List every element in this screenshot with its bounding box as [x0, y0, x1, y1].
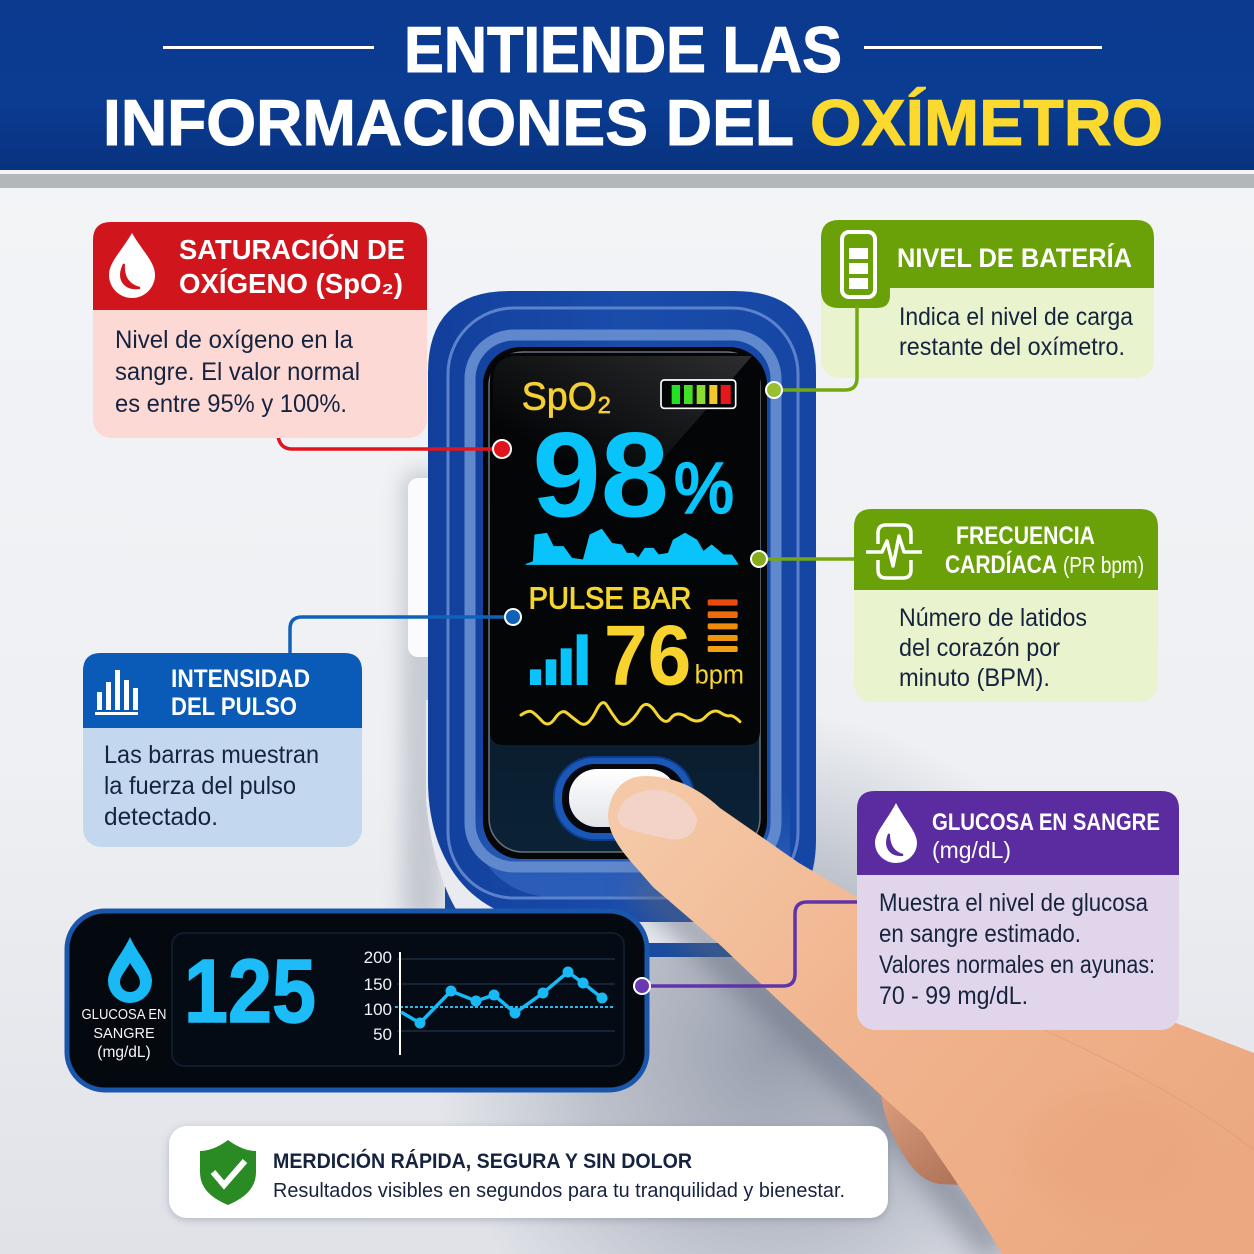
- glucose monitor panel: [67, 911, 647, 1090]
- description: del corazón por: [899, 634, 1060, 662]
- axis labels: 50: [373, 1025, 392, 1044]
- heading line 2: DEL PULSO: [171, 693, 297, 721]
- heading unit: (mg/dL): [932, 837, 1011, 863]
- description: Las barras muestran: [104, 741, 319, 769]
- pulse waveform: [521, 703, 740, 724]
- card header: [854, 509, 1158, 590]
- description: detectado.: [104, 803, 218, 831]
- card body: [821, 220, 1154, 378]
- callout: frecuencia cardíaca: [759, 509, 1158, 702]
- description: Nivel de oxígeno en la: [115, 326, 353, 354]
- heading: SATURACIÓN DE: [179, 234, 405, 265]
- hand pressing the button: [608, 776, 1254, 1254]
- description: en sangre estimado.: [879, 920, 1081, 948]
- thumb: [881, 1095, 965, 1185]
- card header: [857, 791, 1179, 875]
- banner text: Resultados visibles en segundos para tu tranquilidad y bienestar.: [273, 1180, 845, 1202]
- panel label: [82, 1007, 166, 1061]
- power button: [554, 757, 694, 840]
- card body: [857, 791, 1179, 1030]
- connector: purple: [642, 902, 860, 986]
- icon: blood drop: [875, 803, 917, 863]
- heading unit: (PR bpm): [1063, 552, 1144, 578]
- finger and palm: [608, 776, 1254, 1254]
- signal bars: [530, 634, 588, 685]
- description: sangre. El valor normal: [115, 358, 360, 386]
- card body: [854, 509, 1158, 702]
- screen display: [490, 353, 760, 745]
- description: es entre 95% y 100%.: [115, 390, 347, 418]
- device shadow: [402, 470, 442, 920]
- card body: [83, 653, 362, 847]
- plethysmograph waveform: [526, 529, 737, 564]
- orange level bars: [708, 599, 738, 652]
- description: [104, 741, 319, 831]
- description: 70 - 99 mg/dL.: [879, 982, 1028, 1010]
- heading: NIVEL DE BATERÍA: [897, 242, 1132, 273]
- title highlight: OXÍMETRO: [810, 86, 1163, 159]
- description: [115, 326, 360, 418]
- description: [899, 604, 1087, 692]
- heading line 2: CARDÍACA: [945, 550, 1057, 579]
- description: Valores normales en ayunas:: [879, 951, 1155, 979]
- header banner: [0, 0, 1254, 188]
- icon: oxygen drop: [109, 233, 155, 298]
- connector: green: [774, 306, 857, 390]
- pulse oximeter device: [402, 291, 816, 957]
- finger clip tab: [408, 478, 438, 657]
- heading: GLUCOSA EN SANGRE: [932, 809, 1160, 836]
- description: Muestra el nivel de glucosa: [879, 889, 1148, 917]
- SpO2 label: SpO₂: [522, 374, 612, 418]
- front shell: [428, 291, 816, 922]
- description: restante del oxímetro.: [899, 333, 1125, 361]
- knuckle shading: [1020, 1090, 1200, 1210]
- description: Número de latidos: [899, 604, 1087, 632]
- description: [899, 303, 1133, 361]
- skin crease: [1044, 1030, 1254, 1150]
- axis labels: [364, 948, 392, 1044]
- description: minuto (BPM).: [899, 664, 1050, 692]
- axis labels: 150: [364, 975, 392, 994]
- callout: nivel de batería: [774, 220, 1154, 390]
- panel label: SANGRE: [93, 1026, 155, 1042]
- pulse bar label: PULSE BAR: [529, 582, 691, 616]
- pulse rate value: 76: [604, 608, 691, 703]
- icon: bars: [95, 670, 138, 715]
- bottom banner: [169, 1126, 888, 1218]
- heading: INTENSIDAD: [171, 665, 310, 693]
- bpm unit: bpm: [695, 659, 744, 689]
- screen bezel: [483, 347, 767, 859]
- data series: [401, 972, 602, 1023]
- banner heading: MERDICIÓN RÁPIDA, SEGURA Y SIN DOLOR: [273, 1149, 692, 1173]
- description: Indica el nivel de carga: [899, 303, 1133, 331]
- icon: heartbeat: [866, 525, 922, 578]
- card body: [93, 222, 427, 438]
- callout: glucosa en sangre: [857, 791, 1179, 1030]
- axis labels: 100: [364, 1000, 392, 1019]
- heading line 2: OXÍGENO (SpO₂): [179, 268, 403, 299]
- card header: [93, 222, 427, 310]
- callout: intensidad del pulso: [83, 617, 513, 847]
- connector: red: [278, 436, 502, 449]
- connector: green: [759, 557, 856, 561]
- connector: blue: [290, 617, 513, 653]
- panel label: GLUCOSA EN: [82, 1007, 166, 1023]
- icon: battery: [842, 232, 875, 297]
- panel label: (mg/dL): [97, 1044, 151, 1061]
- description: la fuerza del pulso: [104, 772, 296, 800]
- lower housing: [445, 780, 805, 957]
- title line 2: INFORMACIONES DEL: [103, 86, 794, 159]
- fingernail: [618, 790, 697, 839]
- description: [879, 889, 1155, 1010]
- card header: [83, 653, 362, 728]
- icon: shield check: [200, 1140, 256, 1205]
- axis labels: 200: [364, 948, 392, 967]
- percent sign: %: [674, 449, 734, 529]
- connector dots: [493, 382, 782, 994]
- glucose value: 125: [184, 942, 316, 1042]
- title line 1: ENTIENDE LAS: [404, 13, 842, 86]
- hand shadow: [640, 880, 1000, 1254]
- card header: [821, 220, 1154, 308]
- trend chart: [364, 948, 615, 1055]
- callout: saturación de oxígeno: [93, 222, 502, 449]
- screen readings, in zoom units: [521, 374, 744, 724]
- battery indicator: [661, 380, 736, 408]
- SpO2 value: 98: [532, 407, 669, 542]
- icon: glucose drop: [108, 937, 152, 1003]
- panel frame: [67, 911, 647, 1090]
- heading: FRECUENCIA: [956, 522, 1095, 550]
